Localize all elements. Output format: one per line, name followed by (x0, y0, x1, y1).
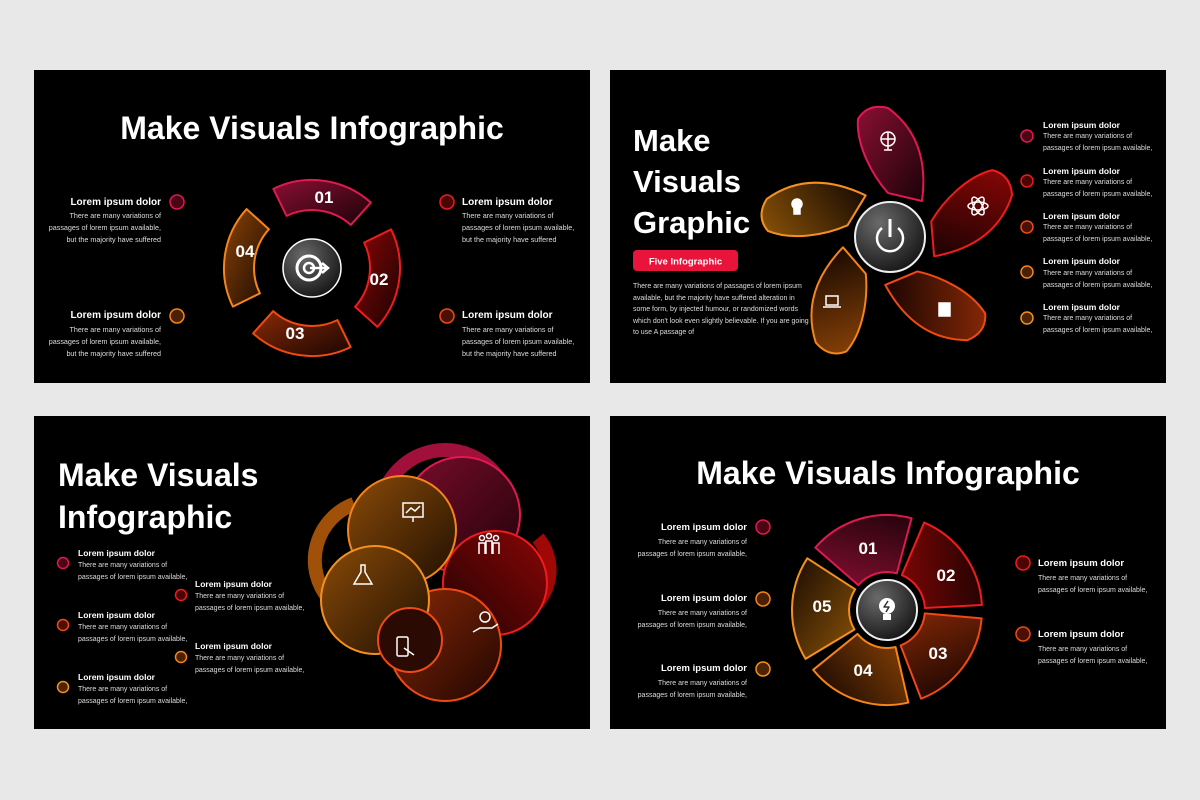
item 5: There are many variations of (195, 655, 284, 662)
item 3: There are many variations of (1043, 224, 1132, 231)
clover chart (315, 450, 550, 701)
pinwheel chart (756, 107, 1024, 362)
item 3: passages of lorem ipsum available, (1043, 236, 1152, 243)
sector 02 (885, 514, 994, 633)
item right 2: passages of lorem ipsum available, (1038, 658, 1147, 665)
item right 1: There are many variations of (1038, 575, 1127, 582)
blade orange-red (884, 247, 993, 362)
item right 2 (1016, 627, 1147, 665)
item left 2 (49, 309, 184, 358)
item right 1: but the majority have suffered (462, 235, 557, 244)
title 2 (633, 123, 750, 240)
item 1: There are many variations of (1043, 133, 1132, 140)
item 5 (1021, 302, 1152, 334)
list panel 4 (638, 520, 1147, 699)
item right 1: passages of lorem ipsum available, (462, 223, 574, 232)
item 2: passages of lorem ipsum available, (78, 636, 187, 643)
blade red (914, 166, 1024, 258)
item right 2: Lorem ipsum dolor (1038, 629, 1124, 640)
blob red (443, 531, 547, 635)
hub power icon (855, 202, 925, 272)
outer arcs (383, 443, 504, 478)
icon: phone (397, 637, 414, 656)
sector 03 (882, 589, 993, 707)
icon: bulb (792, 199, 802, 214)
item left 2 (638, 592, 770, 629)
segment 03 (253, 311, 351, 356)
item 4: There are many variations of (1043, 270, 1132, 277)
clover icons (354, 503, 499, 656)
segment 02 (355, 229, 400, 327)
icon: target (283, 239, 341, 297)
icon: laptop (823, 296, 841, 307)
item left 1: but the majority have suffered (66, 235, 161, 244)
item left 2: passages of lorem ipsum available, (638, 622, 747, 629)
icon: hand coin (473, 612, 498, 632)
title 4: Make Visuals Infographic (696, 455, 1080, 491)
item right 2: passages of lorem ipsum available, (462, 337, 574, 346)
item 1: There are many variations of (78, 562, 167, 569)
panel 3: clover infographic (34, 416, 590, 729)
item left 2: but the majority have suffered (66, 349, 161, 358)
item 2: There are many variations of (1043, 179, 1132, 186)
item left 2: There are many variations of (70, 325, 161, 334)
item 2 (1021, 166, 1152, 198)
blob pink (416, 456, 521, 571)
icon: flask (354, 565, 372, 584)
paragraph (632, 283, 809, 336)
icon: book (939, 303, 950, 316)
title 2: Visuals (633, 164, 741, 199)
item right 2: There are many variations of (1038, 646, 1127, 653)
item right 2 (440, 309, 574, 358)
segment 01: 01 (315, 188, 333, 207)
item left 1: passages of lorem ipsum available, (49, 223, 161, 232)
icon: globe (881, 132, 895, 150)
item left 3: Lorem ipsum dolor (661, 663, 747, 674)
item 2 (58, 610, 187, 643)
item 2: passages of lorem ipsum available, (1043, 191, 1152, 198)
sector numbers (813, 539, 955, 680)
item left 2: There are many variations of (658, 610, 747, 617)
item 5: Lorem ipsum dolor (1043, 302, 1121, 312)
icon: people (479, 534, 499, 554)
sector numbers: 01 (859, 539, 877, 558)
button: Five Infographic (633, 250, 738, 271)
title 3 (58, 457, 258, 535)
item left 2: passages of lorem ipsum available, (49, 337, 161, 346)
item left 2: Lorem ipsum dolor (661, 593, 747, 604)
item 1: Lorem ipsum dolor (1043, 120, 1121, 130)
segment 02: 02 (370, 270, 388, 289)
item 5 (176, 641, 304, 674)
item 3 (1021, 211, 1152, 243)
item right 1 (440, 195, 574, 244)
item 2: Lorem ipsum dolor (78, 610, 156, 620)
paragraph: which don't look even slightly believable. If you are going (632, 318, 809, 325)
item 4: Lorem ipsum dolor (1043, 256, 1121, 266)
item 3: There are many variations of (78, 686, 167, 693)
item 4 (1021, 256, 1152, 289)
item left 1 (49, 195, 184, 244)
item 3: Lorem ipsum dolor (78, 672, 156, 682)
ring chart (224, 180, 400, 356)
item right 1: passages of lorem ipsum available, (1038, 587, 1147, 594)
sector 01 (811, 504, 926, 594)
item 4: passages of lorem ipsum available, (195, 605, 304, 612)
item 1: passages of lorem ipsum available, (1043, 145, 1152, 152)
blob orange top (348, 476, 456, 584)
icon: presentation (403, 503, 423, 522)
segment 01 (273, 180, 371, 225)
item left 3: There are many variations of (658, 680, 747, 687)
item left 3 (638, 662, 770, 699)
sector numbers: 03 (929, 644, 947, 663)
item left 1: passages of lorem ipsum available, (638, 551, 747, 558)
segment 04: 04 (236, 242, 255, 261)
item right 2: but the majority have suffered (462, 349, 557, 358)
item left 1: There are many variations of (658, 539, 747, 546)
panel 1: ring infographic (34, 70, 590, 383)
panel 4: pentagon sectors infographic (610, 416, 1166, 729)
icon: atom (968, 195, 988, 217)
button: Five Infographic: Five Infographic (649, 256, 722, 268)
text items panel 1 (49, 195, 574, 358)
segment 03: 03 (286, 324, 304, 343)
list panel 3 (58, 548, 304, 705)
item right 1: There are many variations of (462, 211, 553, 220)
item left 1: Lorem ipsum dolor (661, 522, 747, 533)
item 3: Lorem ipsum dolor (1043, 211, 1121, 221)
sector 05 (791, 558, 856, 660)
title 3: Make Visuals (58, 457, 258, 493)
title 2: Make (633, 123, 711, 158)
item right 1: Lorem ipsum dolor (462, 197, 553, 208)
title 3: Infographic (58, 499, 232, 535)
sector 04 (809, 624, 924, 716)
blade orange (786, 247, 895, 361)
blob orange left (321, 546, 429, 654)
hub bulb icon (857, 580, 917, 640)
item 4: passages of lorem ipsum available, (1043, 282, 1152, 289)
list panel 2 (1021, 120, 1152, 334)
paragraph: There are many variations of passages of lorem ipsum (633, 283, 802, 290)
item right 1: Lorem ipsum dolor (1038, 558, 1124, 569)
paragraph: some form, by injected humour, or randomized words (633, 306, 798, 313)
item 5: passages of lorem ipsum available, (195, 667, 304, 674)
item 5: There are many variations of (1043, 315, 1132, 322)
item 4: Lorem ipsum dolor (195, 579, 273, 589)
item right 1 (1016, 556, 1147, 594)
sector chart (791, 504, 994, 716)
sector numbers: 02 (937, 566, 955, 585)
item right 2: There are many variations of (462, 325, 553, 334)
item left 1: There are many variations of (70, 211, 161, 220)
item 1: Lorem ipsum dolor (78, 548, 156, 558)
pinwheel icons (792, 132, 988, 316)
item 1 (58, 548, 187, 581)
item 3: passages of lorem ipsum available, (78, 698, 187, 705)
item 2: Lorem ipsum dolor (1043, 166, 1121, 176)
blade amber (756, 165, 866, 256)
item 3 (58, 672, 187, 705)
item 5: passages of lorem ipsum available, (1043, 327, 1152, 334)
item 1: passages of lorem ipsum available, (78, 574, 187, 581)
item left 3: passages of lorem ipsum available, (638, 692, 747, 699)
panel 2: pinwheel infographic (610, 70, 1166, 383)
item 2: There are many variations of (78, 624, 167, 631)
item right 2: Lorem ipsum dolor (462, 310, 553, 321)
item 5: Lorem ipsum dolor (195, 641, 273, 651)
title 1: Make Visuals Infographic (120, 110, 504, 146)
item left 2: Lorem ipsum dolor (70, 310, 161, 321)
segment 04 (224, 209, 269, 307)
blob orange-red (389, 589, 501, 701)
paragraph: to use A passage of (633, 329, 694, 336)
item 4 (176, 579, 304, 612)
item 1 (1021, 120, 1152, 152)
title 2: Graphic (633, 205, 750, 240)
item 4: There are many variations of (195, 593, 284, 600)
paragraph: available, but the majority have suffered alteration in (633, 295, 795, 302)
item left 1 (638, 520, 770, 558)
blade pink (858, 107, 923, 201)
sector numbers: 05 (813, 597, 831, 616)
sector numbers: 04 (854, 661, 873, 680)
item left 1: Lorem ipsum dolor (70, 197, 161, 208)
